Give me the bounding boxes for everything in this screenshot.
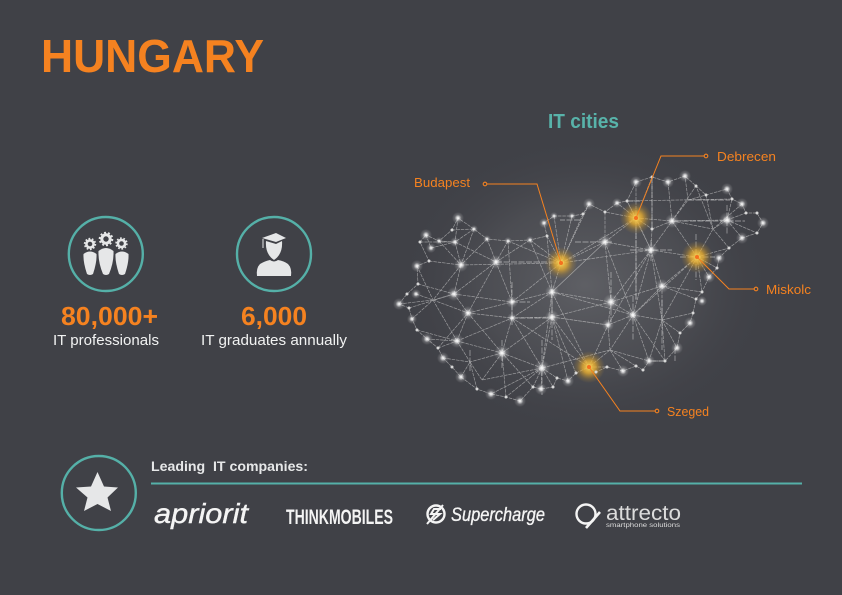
logo: apriorit: apriorit	[154, 498, 249, 529]
label: IT professionals: IT professionals	[53, 332, 159, 349]
logo: attrecto: smartphone solutions	[606, 523, 680, 529]
callout: Debrecen	[634, 149, 776, 220]
callout: Szeged	[587, 365, 709, 419]
label: IT graduates annually: IT graduates annually	[201, 332, 347, 349]
callout: Debrecen: Debrecen	[717, 149, 776, 164]
logo: attrecto: attrecto	[606, 502, 681, 525]
stat: IT professionals	[53, 217, 159, 349]
value: 6,000: 6,000	[241, 301, 307, 331]
heading: IT cities: IT cities	[548, 111, 619, 133]
icon: graduate	[237, 217, 311, 291]
small nodes	[406, 176, 758, 398]
callout: Miskolc: Miskolc	[766, 282, 812, 297]
callout: Miskolc	[695, 255, 812, 297]
divider line	[151, 482, 802, 484]
icon: people with gears	[69, 217, 143, 291]
logo: attrecto	[576, 502, 681, 529]
logo: Thinkmobiles: THINKMOBILES	[286, 506, 393, 529]
map: Hungary network	[393, 135, 775, 435]
title: HUNGARY	[41, 30, 264, 82]
callout: Szeged: Szeged	[667, 404, 709, 419]
stat: IT graduates	[201, 217, 347, 349]
gold glows	[545, 202, 713, 383]
icon: star	[62, 456, 136, 530]
bright nodes	[393, 170, 769, 407]
heading: leading IT companies: Leading IT companies:	[151, 458, 308, 474]
value: 80,000+: 80,000+	[61, 301, 158, 331]
callout: Budapest: Budapest	[414, 175, 470, 190]
callout: Budapest	[414, 175, 563, 265]
logo: Supercharge: Supercharge	[451, 505, 545, 526]
